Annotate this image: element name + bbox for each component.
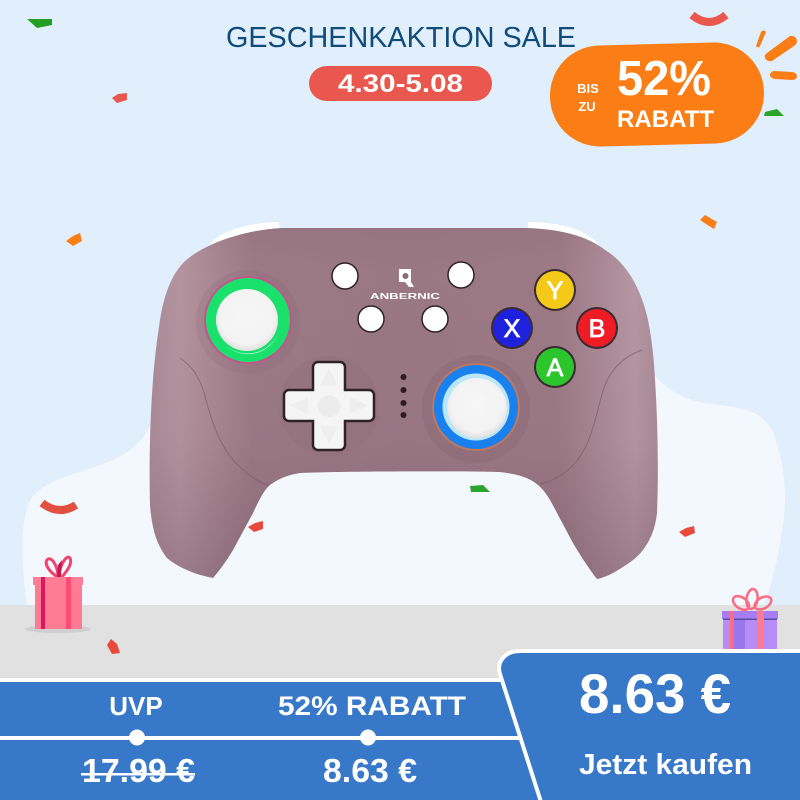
discount badge [549, 41, 765, 148]
discount badge: BIS [577, 81, 599, 96]
button A [534, 346, 576, 388]
left joystick with green ring [196, 270, 300, 374]
logo: ANBERNIC [370, 292, 440, 301]
call to action panel [499, 651, 800, 800]
floor [0, 605, 800, 680]
white shoulder bumpers [208, 222, 602, 250]
call to action panel: 8.63 € [579, 662, 731, 725]
title: GESCHENKAKTION SALE [226, 22, 576, 54]
grip seams [180, 350, 642, 485]
pink gift box [25, 557, 91, 633]
button A: A [547, 354, 564, 382]
menu buttons [332, 262, 474, 332]
button B [576, 307, 618, 349]
label: 52% Rabatt: 52% RABATT [278, 691, 467, 721]
sale price: 8.63 € [323, 752, 417, 789]
background cloud shape [22, 370, 785, 607]
button Y: Y [547, 277, 564, 305]
original price: 17.99 € [82, 752, 195, 789]
logo [370, 269, 440, 301]
purple gift box [722, 588, 778, 649]
button X [491, 307, 533, 349]
timeline [0, 730, 520, 746]
date pill [309, 66, 492, 101]
date pill: 4.30-5.08 [338, 70, 463, 98]
controller body [150, 228, 658, 579]
price bar [0, 678, 550, 800]
call to action panel: Jetzt kaufen [579, 749, 752, 781]
discount badge: RABATT [617, 106, 714, 133]
badge rays [756, 30, 797, 80]
button X: X [504, 315, 521, 343]
button Y [534, 269, 576, 311]
label: UVP: UVP [109, 691, 163, 721]
button B: B [589, 315, 605, 343]
discount badge: ZU [578, 99, 596, 114]
d-pad [279, 356, 379, 456]
discount badge: 52% [617, 52, 711, 106]
game controller [150, 222, 658, 579]
right joystick with blue ring [422, 355, 530, 463]
confetti [27, 15, 784, 654]
indicator lights [400, 374, 406, 418]
